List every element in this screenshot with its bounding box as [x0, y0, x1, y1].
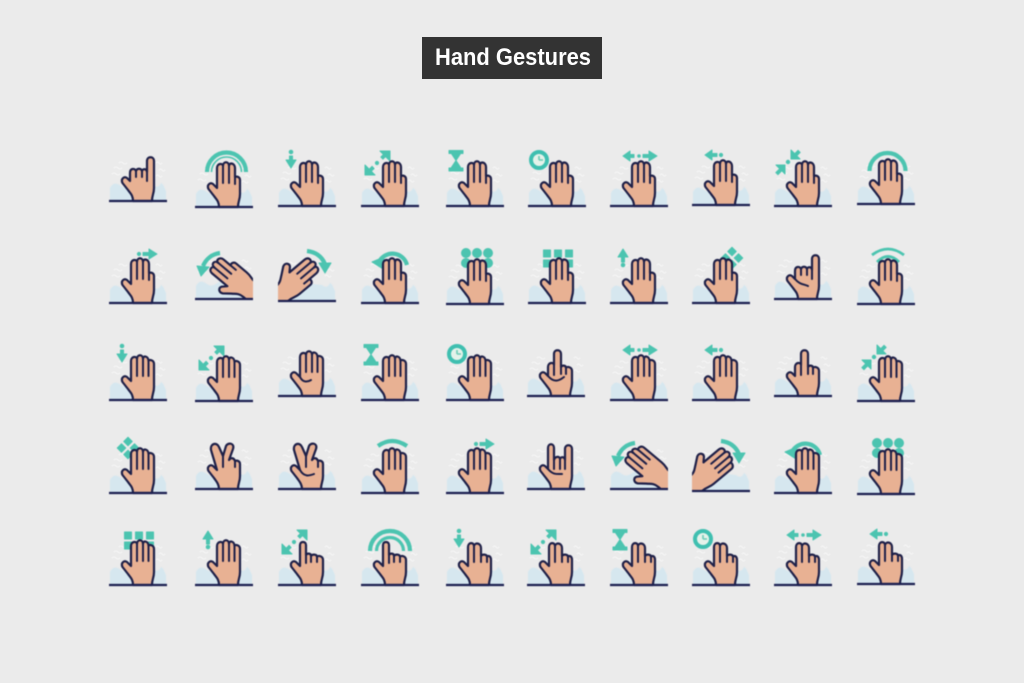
icon: rock sign: [527, 444, 585, 489]
icon: three fingers circles: [446, 248, 504, 304]
icon: four fingers swipe down: [109, 344, 167, 400]
icon: two fingers swipe down: [446, 529, 504, 585]
icon: middle finger: [774, 350, 832, 396]
icon: four fingers top arc: [361, 441, 419, 493]
icon: three fingers clock: [528, 152, 586, 206]
icon: three fingers squares: [528, 250, 586, 303]
icon: middle finger folded hand: [527, 350, 585, 396]
icon: three fingers pinch: [774, 150, 832, 206]
icon: four fingers pinch: [857, 345, 915, 401]
icon: three fingers hourglass: [446, 150, 504, 206]
icon: four fingers swipe both ways: [610, 345, 668, 400]
icon: three fingers spread: [361, 151, 419, 206]
icon: pinky up with crease: [774, 255, 832, 299]
icon: tilted hand rotate left: [195, 252, 275, 321]
icon grid: [109, 150, 915, 585]
icon: four fingers swipe right: [446, 439, 504, 493]
icon: one finger double arc: [361, 531, 419, 585]
icon: two fingers swipe left: [857, 529, 915, 584]
icon: two fingers swipe both ways: [774, 530, 832, 585]
icon: two fingers spread: [527, 530, 585, 585]
icon: three fingers arc arrow: [361, 254, 419, 303]
icon: four fingers swipe up: [195, 531, 253, 585]
icon: open hand: [278, 351, 336, 396]
icon: pinky up: [109, 157, 167, 201]
icon: tilted open hand rotate left: [610, 442, 690, 511]
icon: three fingers swipe down: [278, 150, 336, 206]
icon: three fingers diamond: [692, 247, 750, 303]
icon: three fingers swipe both ways: [610, 151, 668, 206]
icon: three fingers swipe right: [109, 249, 167, 303]
icon: two fingers hourglass: [610, 530, 668, 585]
icon: three fingers double waves: [857, 249, 915, 304]
icon: four fingers circles: [857, 438, 915, 494]
icon: three fingers swipe left: [692, 150, 750, 205]
icon: victory sign with crease: [278, 444, 336, 489]
icon: two fingers clock: [692, 531, 750, 585]
icon: four fingers squares: [109, 532, 167, 585]
icon: three fingers double arc: [195, 152, 253, 207]
icon: one finger spread: [278, 530, 336, 585]
title: [422, 37, 602, 79]
icon: tilted hand rotate right: [251, 249, 336, 318]
title: Hand Gestures: [435, 44, 591, 71]
icon: three fingers arc: [857, 153, 915, 204]
icon: three fingers swipe up: [610, 249, 668, 303]
icon: four fingers spread: [195, 346, 253, 401]
icon: four fingers swipe left: [692, 345, 750, 400]
icon: four fingers diamond: [109, 437, 167, 493]
icon: victory sign: [195, 444, 253, 489]
icon: four fingers clock: [446, 346, 504, 400]
icon: four fingers hourglass: [361, 344, 419, 400]
icon: tilted open hand rotate right: [665, 439, 750, 508]
icon: four fingers arc arrow: [774, 444, 832, 493]
